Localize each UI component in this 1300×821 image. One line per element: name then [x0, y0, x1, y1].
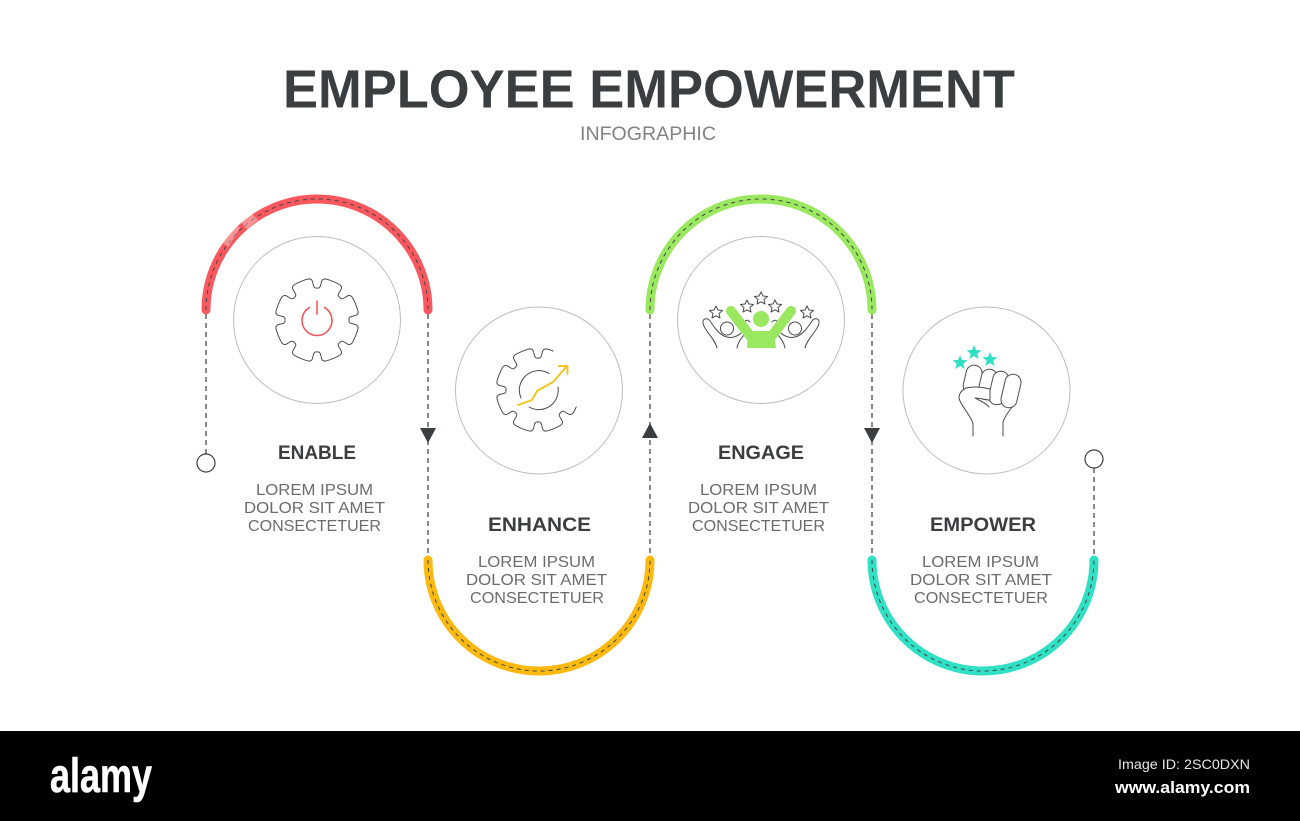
panel: empower [903, 307, 1070, 607]
icon: gear with power symbol [274, 277, 360, 363]
panel: enhance [456, 307, 622, 607]
arc: green top arc [650, 199, 872, 310]
text: enhance description: LOREM IPSUM [478, 554, 595, 571]
text: enhance description: DOLOR SIT AMET [466, 572, 608, 589]
connector: arrow from Enable down to Enhance [420, 314, 436, 556]
text: enable description: CONSECTETUER [248, 518, 381, 535]
arc: yellow bottom arc [428, 560, 650, 671]
circle: empower [903, 307, 1070, 474]
heading: enhance: ENHANCE [488, 515, 591, 536]
footer logo: alamy [50, 750, 152, 803]
connector: dashed line with start node on the left [197, 314, 215, 472]
text: empower description: DOLOR SIT AMET [910, 572, 1053, 589]
subtitle: INFOGRAPHIC [580, 124, 716, 145]
text: engage description: CONSECTETUER [692, 518, 825, 535]
heading: empower: EMPOWER [930, 515, 1036, 536]
heading: enable: ENABLE [278, 443, 356, 464]
icon: gear with rising arrow [495, 347, 576, 433]
text: empower description: LOREM IPSUM [922, 554, 1039, 571]
heading: engage: ENGAGE [718, 443, 804, 464]
circle: enhance [456, 307, 622, 474]
text: enable description: DOLOR SIT AMET [244, 500, 386, 517]
footer bar [0, 731, 1300, 821]
title: EMPLOYEE EMPOWERMENT [283, 60, 1015, 120]
icon: raised fist with stars [952, 345, 1023, 436]
arc: teal bottom arc [872, 560, 1094, 671]
connector: dashed line with end node on the right [1085, 450, 1103, 556]
arc: red top arc [206, 199, 428, 310]
connector: arrow from Engage down to Empower [864, 314, 880, 556]
connector: arrow from Enhance up to Engage [642, 314, 658, 556]
text: enhance description: CONSECTETUER [470, 590, 604, 607]
circle: enable [234, 236, 400, 404]
footer image id: Image ID: 2SC0DXN [1118, 756, 1250, 772]
footer url: www.alamy.com [1114, 779, 1250, 797]
panel: engage [678, 236, 844, 535]
text: enable description: LOREM IPSUM [256, 482, 373, 499]
icon: cheering team with stars [703, 292, 819, 348]
text: empower description: CONSECTETUER [914, 590, 1048, 607]
panel: enable [234, 236, 400, 535]
text: engage description: DOLOR SIT AMET [688, 500, 830, 517]
circle: engage [678, 236, 844, 404]
text: engage description: LOREM IPSUM [700, 482, 817, 499]
